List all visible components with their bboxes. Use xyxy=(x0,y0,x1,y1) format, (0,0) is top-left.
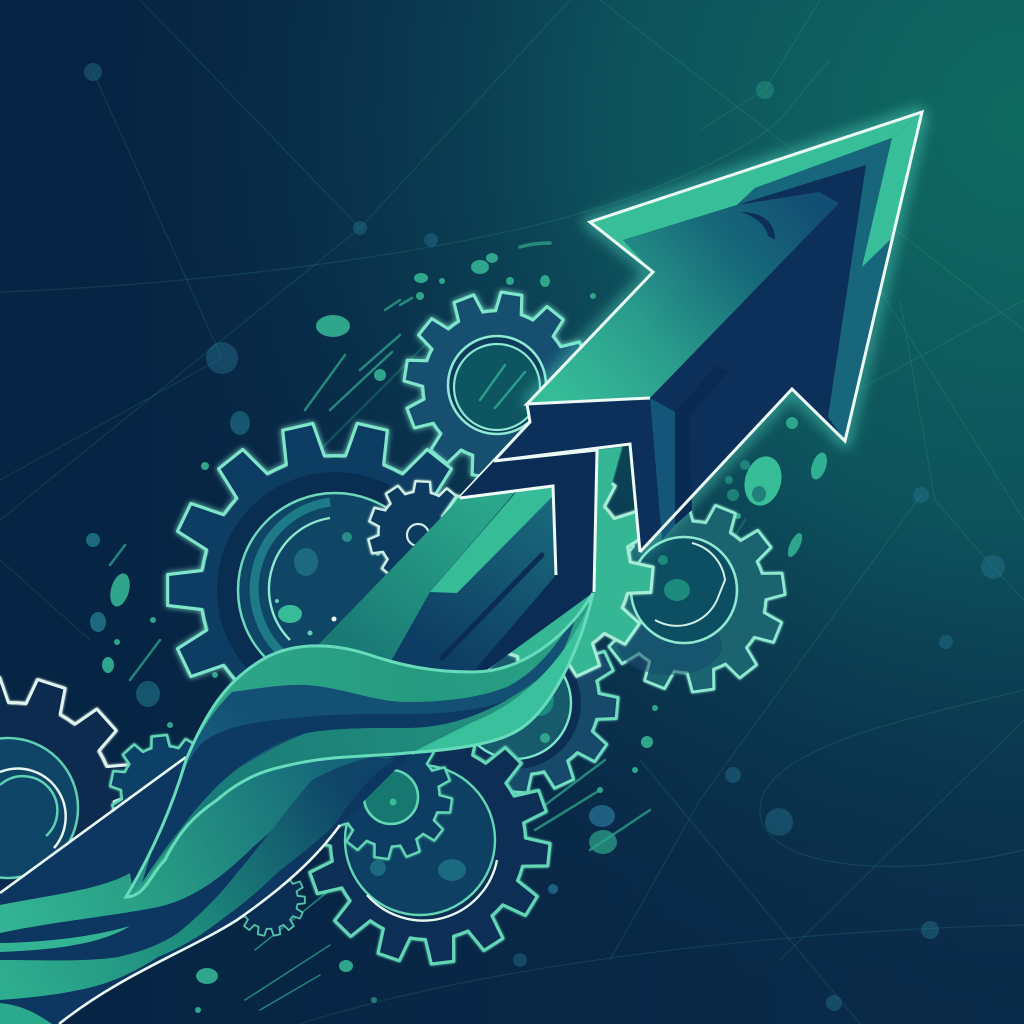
ribbon blue band xyxy=(126,613,577,897)
arrow glow xyxy=(527,112,922,552)
arrow stem xyxy=(317,450,597,680)
top blue band xyxy=(737,138,892,205)
tail bottom strip xyxy=(0,1003,52,1024)
stem white lines xyxy=(460,450,597,592)
facet mark xyxy=(740,212,775,240)
ribbon lower green band xyxy=(134,593,593,897)
left gear hub rings xyxy=(0,738,78,878)
gear: far left xyxy=(0,654,163,956)
gear: tiny bottom xyxy=(233,864,305,936)
gear: small centre xyxy=(357,469,483,597)
gear: small with lens hub xyxy=(320,727,460,867)
stem blue facet xyxy=(390,486,556,672)
tail body xyxy=(0,745,420,1024)
gear: bottom large xyxy=(294,707,562,977)
large gear hub xyxy=(217,472,453,708)
ribbon outline xyxy=(126,593,593,897)
top green edge xyxy=(590,112,922,272)
main facet xyxy=(527,192,839,404)
tail band upper xyxy=(0,757,395,933)
right blue band xyxy=(828,112,922,441)
gear: green behind arrow xyxy=(420,447,662,691)
right green sliver xyxy=(862,112,922,267)
tail thin strip xyxy=(0,926,130,952)
ribbon top band xyxy=(126,593,593,897)
gear: small left xyxy=(100,724,230,856)
white outlines xyxy=(460,112,922,552)
arrow head xyxy=(460,112,922,552)
tail band lower xyxy=(0,757,395,1000)
gear: top centre xyxy=(391,279,603,491)
gear: behind swoosh xyxy=(425,600,625,800)
arrow base xyxy=(494,112,922,552)
neck blue band xyxy=(650,398,675,540)
ribbon bright highlight xyxy=(413,603,590,752)
neck dark line xyxy=(675,365,728,525)
stem dark line xyxy=(442,555,542,658)
gear: large left xyxy=(168,420,502,760)
stem navy band xyxy=(390,450,597,680)
swoosh ribbon xyxy=(126,593,593,897)
arrow tail xyxy=(0,745,420,1024)
gear: right xyxy=(583,490,797,704)
particles and speed streaks xyxy=(86,243,830,1013)
stem bright stripe xyxy=(430,487,552,593)
tail white lines xyxy=(0,757,340,1024)
stem green facet xyxy=(317,490,517,663)
ribbon navy band xyxy=(142,690,523,883)
